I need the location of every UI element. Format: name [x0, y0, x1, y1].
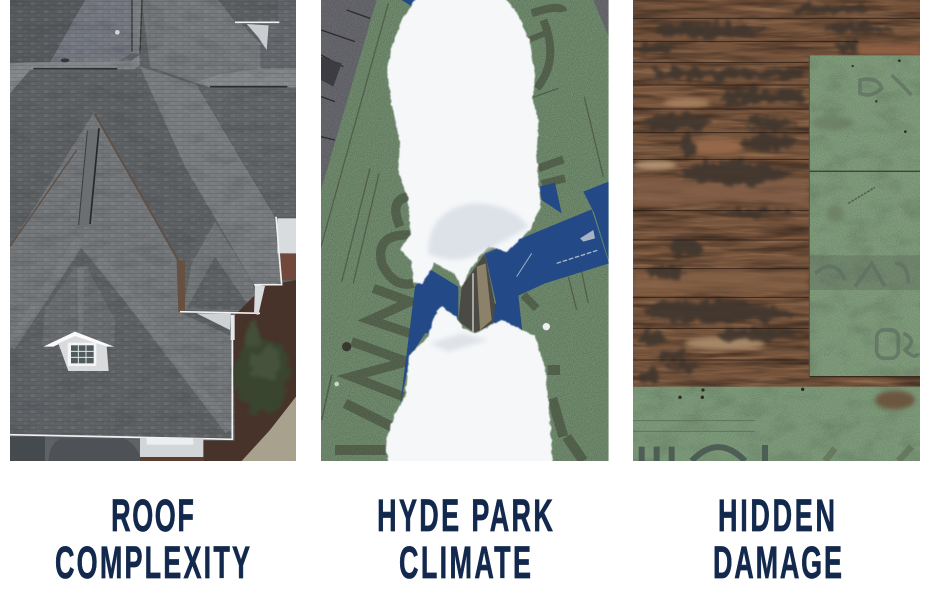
dark weathered wood stains — [635, 2, 892, 384]
diagonal hip band — [140, 67, 282, 285]
right roof section — [195, 68, 296, 217]
top right roof facets — [142, 0, 260, 84]
shrub — [233, 320, 290, 413]
ridge vent top — [132, 0, 142, 54]
heading: hidden damage: HIDDEN — [718, 490, 835, 541]
snow mound upper — [387, 0, 541, 287]
wood dark streaks — [633, 0, 920, 388]
gable hip lines — [10, 240, 230, 430]
exposed gap in ridge — [458, 253, 495, 333]
faded print on bottom sheet — [642, 445, 765, 461]
heading: hyde park climate — [377, 490, 553, 588]
blue flashing tape vertical — [400, 268, 522, 407]
bottom porch — [10, 437, 203, 461]
plank seams — [633, 18, 920, 360]
ridge vent on gable — [77, 128, 100, 227]
heading: roof complexity: COMPLEXITY — [55, 537, 250, 588]
snow mound lower — [385, 307, 553, 467]
horizontal ridge — [10, 55, 140, 93]
underlayment bottom — [633, 387, 920, 461]
heading: roof complexity — [55, 490, 250, 588]
wood light streaks — [633, 0, 920, 388]
panel: roof complexity photo — [10, 0, 296, 461]
dormer window — [68, 343, 96, 366]
small right dormer roof — [183, 222, 255, 312]
heading: roof complexity: ROOF — [111, 490, 194, 541]
roof details: vents and valley — [10, 30, 287, 312]
panel: hyde park climate photo — [321, 0, 609, 467]
blue flashing tape diagonal — [402, 0, 609, 306]
underlayment printed marks — [321, 3, 603, 461]
nail holes — [678, 59, 907, 399]
sidewalk — [242, 397, 296, 461]
patched underlayment upper right — [809, 55, 920, 377]
right wall and brick — [277, 218, 296, 280]
faded print on sheet — [815, 75, 918, 358]
shingles right — [593, 0, 609, 37]
heading: hidden damage — [713, 490, 842, 588]
eaves and lower trim — [10, 217, 282, 439]
white trim top right — [235, 22, 279, 50]
panel: hidden damage photo — [633, 0, 920, 461]
front gable facet — [10, 112, 233, 439]
shingle texture — [10, 0, 296, 439]
underlayment texture — [321, 0, 609, 461]
lighter wood patches — [633, 45, 920, 350]
dormer roof — [42, 267, 115, 347]
roof mottling — [10, 0, 296, 440]
heading: hidden damage: DAMAGE — [713, 537, 842, 588]
heading: hyde park climate: CLIMATE — [399, 537, 531, 588]
heading: hyde park climate: HYDE PARK — [377, 490, 553, 541]
dormer front with window — [43, 332, 114, 371]
lower dark facet — [10, 246, 233, 439]
top centre roof facet — [50, 0, 132, 62]
shingles left — [321, 0, 377, 190]
snow clump on underlayment — [543, 323, 550, 330]
top left roof facet — [56, 8, 80, 51]
mulch ground — [203, 280, 296, 461]
main dark facet — [51, 69, 134, 70]
